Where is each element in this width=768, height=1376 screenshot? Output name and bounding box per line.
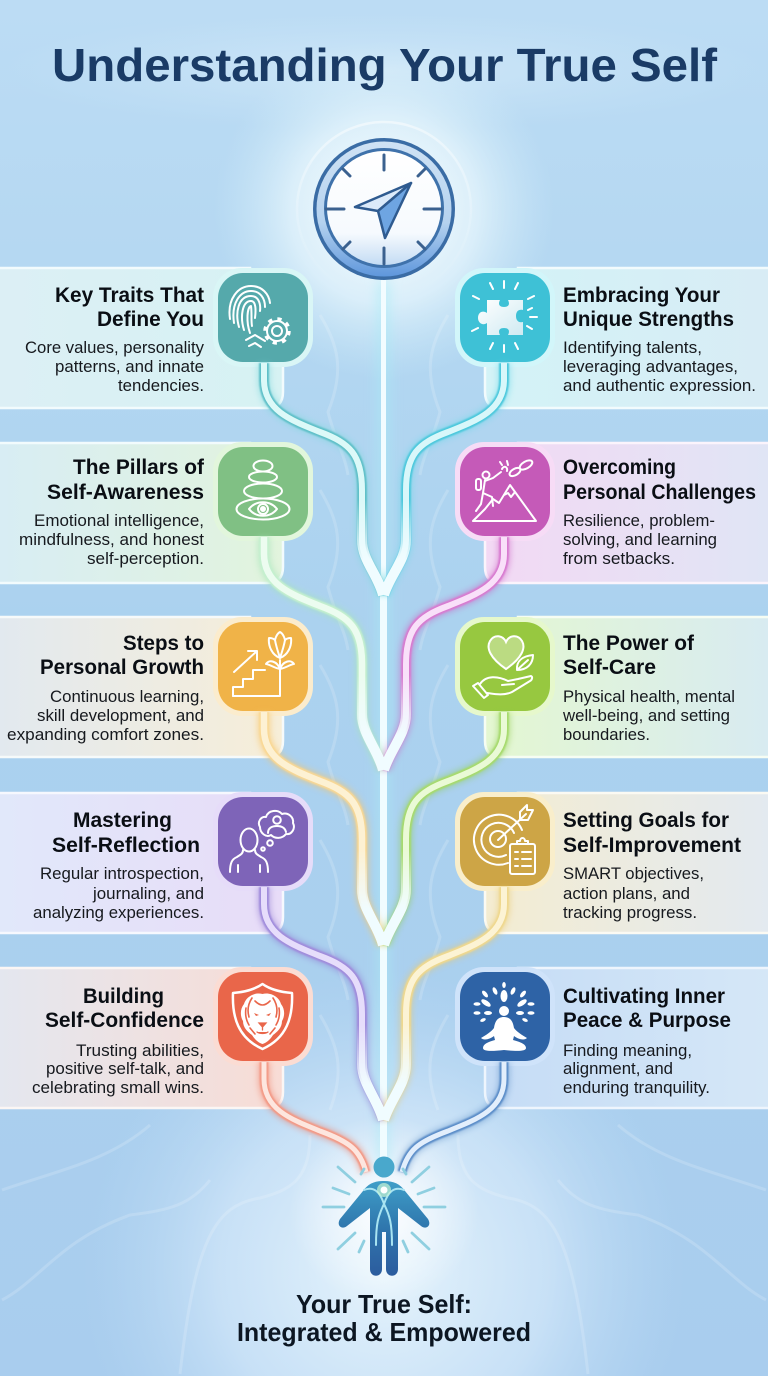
- description: Trusting abilities,: [76, 1042, 204, 1060]
- description: [25, 339, 205, 395]
- figure body: [339, 1181, 429, 1276]
- heading: [563, 455, 756, 504]
- heading: Self-Improvement: [563, 833, 741, 857]
- panel: Embracing Your Unique Strengths: [455, 268, 768, 408]
- panel: Overcoming Personal Challenges: [455, 442, 768, 583]
- panel: Setting Goals for Self-Improvement: [455, 792, 768, 933]
- description: enduring tranquility.: [563, 1079, 710, 1097]
- description: [32, 1042, 204, 1097]
- description: Resilience, problem-: [563, 512, 715, 530]
- description: action plans, and: [563, 885, 690, 903]
- compass ring: [313, 138, 455, 280]
- heading: [40, 631, 204, 679]
- description: patterns, and innate: [55, 358, 204, 376]
- icon: fingerprint and gear: [213, 268, 313, 367]
- heading: Overcoming: [563, 455, 676, 479]
- description: journaling, and: [92, 885, 204, 903]
- description: [563, 512, 717, 568]
- card background: [0, 968, 283, 1108]
- description: and authentic expression.: [563, 377, 756, 395]
- heading: Peace & Purpose: [563, 1008, 731, 1032]
- heading: [55, 283, 204, 331]
- icon: stairs, arrow and flower: [213, 617, 313, 716]
- description: skill development, and: [37, 707, 204, 725]
- card background: [485, 968, 768, 1108]
- description: leveraging advantages,: [563, 358, 738, 376]
- description: [562, 688, 735, 744]
- compass: [297, 122, 471, 296]
- panel: Cultivating Inner Peace & Purpose: [455, 967, 768, 1108]
- card background: [0, 617, 283, 757]
- heading: Embracing Your: [563, 283, 721, 307]
- heading: [52, 808, 200, 857]
- panel: Key Traits That Define You: [0, 268, 313, 408]
- heading: [563, 984, 731, 1032]
- card background: [0, 268, 283, 408]
- connector: Personal Growth: [264, 712, 383, 945]
- heading: Self-Reflection: [52, 833, 200, 857]
- panel: Mastering Self-Reflection: [0, 792, 313, 933]
- compass ticks: [326, 155, 441, 264]
- description: from setbacks.: [563, 550, 675, 568]
- connector: Self-Care: [384, 712, 504, 945]
- icon: climber, mountain and broken chain: [455, 442, 555, 541]
- heading: Personal Growth: [40, 655, 204, 679]
- heading: Setting Goals for: [563, 808, 730, 832]
- heading: Cultivating Inner: [563, 984, 726, 1008]
- description: SMART objectives,: [563, 865, 704, 883]
- description: [33, 865, 204, 922]
- description: tendencies.: [118, 377, 204, 395]
- heading: Self-Care: [563, 655, 656, 679]
- compass needle: [355, 183, 411, 238]
- description: mindfulness, and honest: [19, 531, 204, 549]
- description: Finding meaning,: [563, 1042, 692, 1060]
- description: self-perception.: [87, 550, 204, 568]
- heading: [563, 631, 695, 679]
- description: [19, 512, 204, 568]
- figure head: [374, 1156, 394, 1178]
- panel: Building Self-Confidence: [0, 967, 313, 1108]
- heading: Building: [83, 984, 164, 1008]
- description: analyzing experiences.: [33, 904, 204, 922]
- connector: Setting Goals: [384, 887, 504, 1120]
- icon: person with thought bubble: [213, 792, 313, 891]
- icon: target, arrow and clipboard: [455, 792, 555, 891]
- description: Emotional intelligence,: [34, 512, 204, 530]
- compass halo: [297, 122, 471, 296]
- description: boundaries.: [563, 726, 650, 744]
- description: [563, 1042, 710, 1097]
- card background: [0, 793, 283, 933]
- description: Identifying talents,: [563, 339, 702, 357]
- heading: The Power of: [563, 631, 695, 655]
- heading: Key Traits That: [55, 283, 204, 307]
- connector: Inner Peace: [402, 1062, 504, 1172]
- card background: [485, 268, 768, 408]
- panel: The Pillars of Self-Awareness: [0, 442, 313, 583]
- heading: Self-Confidence: [45, 1008, 204, 1032]
- description: Physical health, mental: [563, 688, 735, 706]
- description: celebrating small wins.: [32, 1079, 204, 1097]
- central figure: [323, 1156, 445, 1276]
- panel: The Power of Self-Care: [455, 617, 768, 757]
- icon: puzzle piece: [455, 268, 555, 367]
- description: expanding comfort zones.: [7, 726, 204, 744]
- description: [563, 339, 756, 395]
- connector: Key Traits: [264, 363, 383, 595]
- title: Understanding Your True Self: [52, 39, 718, 91]
- card background: [485, 443, 768, 583]
- description: well-being, and setting: [562, 707, 730, 725]
- card background: [0, 443, 283, 583]
- heading: The Pillars of: [73, 455, 205, 479]
- heading: [563, 283, 734, 331]
- icon: lion shield: [213, 967, 313, 1066]
- heading: Mastering: [73, 808, 172, 832]
- heading: [47, 455, 205, 504]
- description: [563, 865, 704, 922]
- heading: Unique Strengths: [563, 307, 734, 331]
- footer caption: Your True Self:: [296, 1289, 472, 1319]
- description: alignment, and: [563, 1060, 673, 1078]
- description: Continuous learning,: [50, 688, 204, 706]
- footer caption: [237, 1289, 531, 1347]
- footer caption: Integrated & Empowered: [237, 1317, 531, 1347]
- connector: Personal Challenges: [384, 537, 504, 770]
- figure heart glow: [377, 1183, 391, 1197]
- description: tracking progress.: [563, 904, 697, 922]
- trunk merge highlights: [362, 495, 406, 1120]
- connector: Self-Reflection: [264, 887, 383, 1120]
- heading: Self-Awareness: [47, 480, 204, 504]
- description: [7, 688, 204, 744]
- panel: Steps to Personal Growth: [0, 617, 313, 757]
- connector: Self-Confidence: [264, 1062, 366, 1172]
- heading: [45, 984, 204, 1032]
- connector: Self-Awareness: [264, 537, 383, 770]
- compass face: [327, 151, 441, 265]
- heading: [563, 808, 741, 857]
- heading: Define You: [97, 307, 204, 331]
- icon: meditating figure with leaves: [455, 967, 555, 1066]
- card background: [485, 793, 768, 933]
- description: positive self-talk, and: [46, 1060, 204, 1078]
- icon: heart, leaf and hand: [455, 617, 555, 716]
- connector: Unique Strengths: [384, 363, 504, 595]
- description: solving, and learning: [563, 531, 717, 549]
- description: Core values, personality: [25, 339, 205, 357]
- heading: Steps to: [123, 631, 204, 655]
- central trunk line: [377, 280, 390, 1165]
- description: Regular introspection,: [40, 865, 204, 883]
- figure energy lines: [364, 1189, 404, 1245]
- card background: [485, 617, 768, 757]
- icon: stacked stones and eye: [213, 442, 313, 541]
- figure light rays: [323, 1167, 445, 1252]
